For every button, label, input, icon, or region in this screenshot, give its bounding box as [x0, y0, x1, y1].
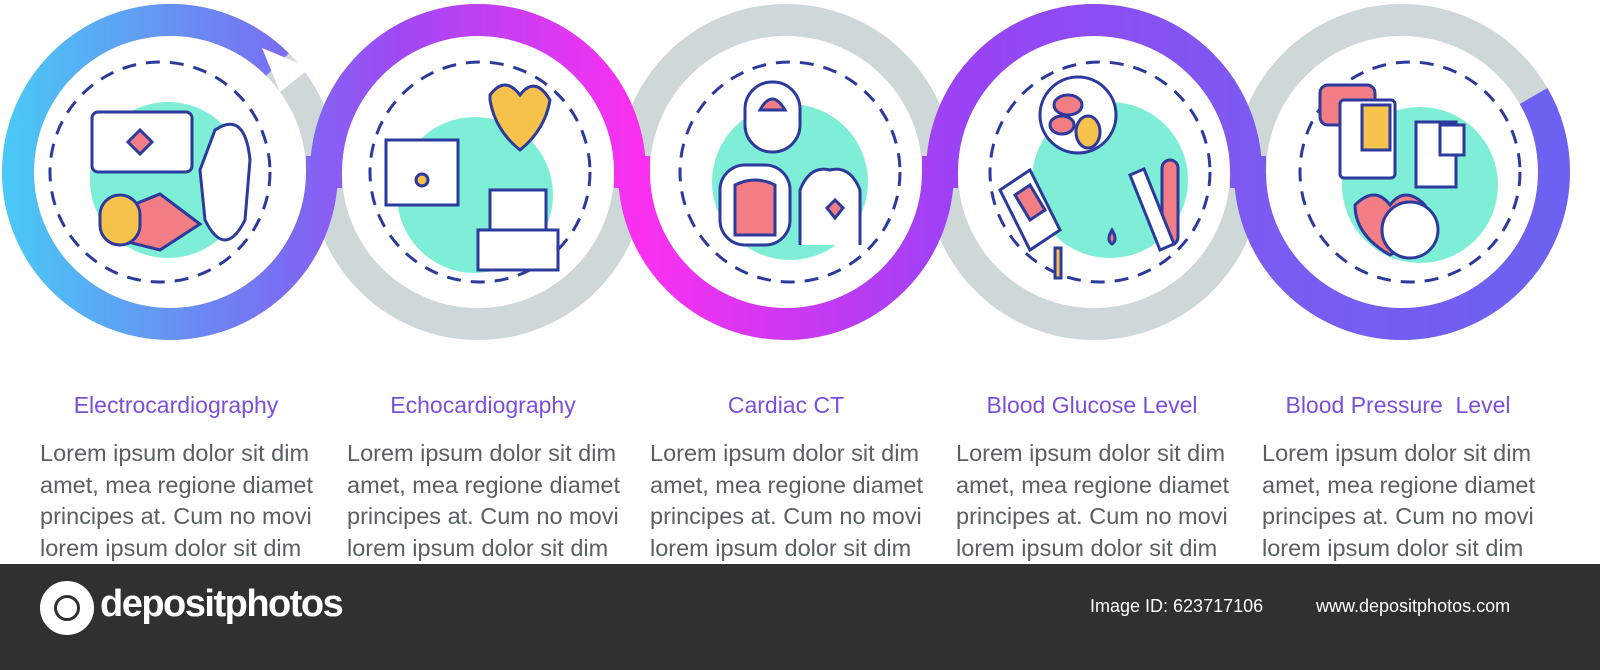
- column: Cardiac CT: amet, mea regione diamet: [650, 472, 923, 498]
- heading: Blood Pressure Level: [1285, 392, 1510, 418]
- column: Blood Pressure Level: amet, mea regione diamet: [1262, 472, 1535, 498]
- column: Echocardiography: amet, mea regione diamet: [347, 472, 620, 498]
- column: Cardiac CT: [650, 392, 923, 561]
- column: Blood Glucose Level: amet, mea regione diamet: [956, 472, 1229, 498]
- column: Blood Pressure Level: principes at. Cum no movi: [1262, 503, 1534, 529]
- diagram: wave of circles: [2, 4, 1570, 340]
- heading: Cardiac CT: [728, 392, 844, 418]
- logo: [40, 581, 342, 635]
- column: Electrocardiography: [40, 392, 313, 561]
- column: Blood Pressure Level: [1262, 392, 1535, 561]
- logo: depositphotos: [100, 583, 342, 625]
- icon: camera: [40, 581, 94, 635]
- column: Cardiac CT: principes at. Cum no movi: [650, 503, 922, 529]
- icon: Echo: [370, 62, 590, 282]
- column: Blood Pressure Level: lorem ipsum dolor sit dim: [1262, 535, 1523, 561]
- footer bar: [0, 564, 1600, 670]
- column: Echocardiography: principes at. Cum no movi: [347, 503, 619, 529]
- colored wave path: [18, 20, 1554, 324]
- url: www.depositphotos.com: [1316, 596, 1510, 616]
- column: Blood Glucose Level: Lorem ipsum dolor sit dim: [956, 440, 1225, 466]
- icon groups: [50, 62, 1520, 282]
- heading: Electrocardiography: [74, 392, 278, 418]
- icon: CT: [680, 62, 900, 282]
- column: Cardiac CT: Lorem ipsum dolor sit dim: [650, 440, 919, 466]
- column: Electrocardiography: Lorem ipsum dolor sit dim: [40, 440, 309, 466]
- heading: Blood Glucose Level: [987, 392, 1197, 418]
- column: Blood Pressure Level: Lorem ipsum dolor sit dim: [1262, 440, 1531, 466]
- icon: glucose: [990, 62, 1210, 282]
- heading: Echocardiography: [390, 392, 576, 418]
- column: Blood Glucose Level: [956, 392, 1229, 561]
- column: Cardiac CT: lorem ipsum dolor sit dim: [650, 535, 911, 561]
- icon: blood pressure: [1300, 62, 1520, 282]
- column: Electrocardiography: amet, mea regione diamet: [40, 472, 313, 498]
- column: Echocardiography: [347, 392, 620, 561]
- column: Blood Glucose Level: principes at. Cum no movi: [956, 503, 1228, 529]
- image id: Image ID: 623717106: [1090, 596, 1263, 616]
- grey rings: [18, 20, 1554, 324]
- arrow tail notch: [262, 48, 310, 92]
- column: Echocardiography: Lorem ipsum dolor sit dim: [347, 440, 616, 466]
- icon: ECG: [50, 62, 270, 282]
- column: Blood Glucose Level: lorem ipsum dolor sit dim: [956, 535, 1217, 561]
- column: Electrocardiography: principes at. Cum no movi: [40, 503, 312, 529]
- column: Echocardiography: lorem ipsum dolor sit dim: [347, 535, 608, 561]
- column: Electrocardiography: lorem ipsum dolor sit dim: [40, 535, 301, 561]
